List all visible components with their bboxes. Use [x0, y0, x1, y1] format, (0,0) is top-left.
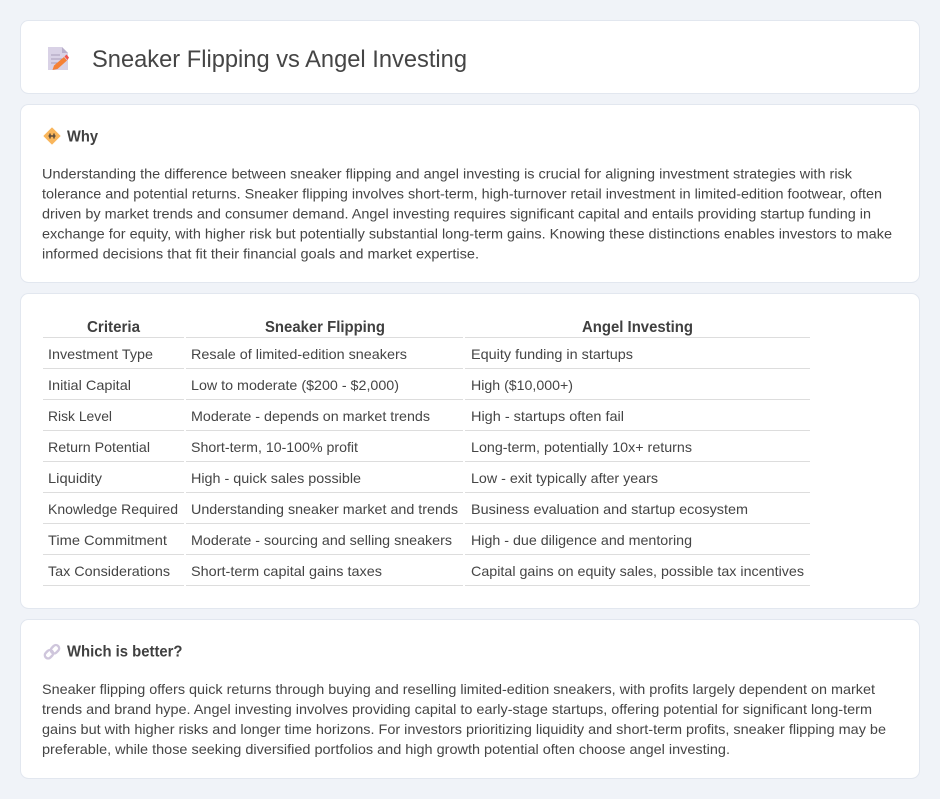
- row: time commitment: [48, 532, 692, 548]
- row: tax considerations: [48, 563, 804, 579]
- row: initial capital: [48, 377, 573, 393]
- row: time commitment: High - due diligence and mentoring: [471, 532, 692, 548]
- icon: warning diamond: [44, 128, 60, 144]
- text block: why: exchange for equity, with higher risk but potentially substantial long-term gains. Knowing these distinctions enables investors to make: [42, 226, 892, 242]
- row: return potential: [48, 439, 692, 455]
- row: risk level: Moderate - depends on market trends: [191, 408, 430, 424]
- text block: why: Understanding the difference between sneaker flipping and angel investing is crucial for aligning investment strategies with risk: [42, 166, 853, 182]
- row: investment type: Equity funding in startups: [471, 346, 633, 362]
- table header row: [87, 319, 693, 336]
- row: tax considerations: Capital gains on equity sales, possible tax incentives: [471, 563, 804, 579]
- row: knowledge required: Business evaluation and startup ecosystem: [471, 501, 748, 517]
- text block: which is better: preferable, while those seeking diversified portfolios and high growth potential often choose angel investing.: [42, 741, 730, 757]
- row: return potential: Long-term, potentially 10x+ returns: [471, 439, 692, 455]
- row: risk level: High - startups often fail: [471, 408, 624, 424]
- panel: which is better: [20, 620, 920, 778]
- row: return potential: Return Potential: [48, 439, 150, 455]
- row: time commitment: Time Commitment: [48, 532, 167, 548]
- text block: which is better: gains but with higher risks and longer time horizons. For investors prioritizing liquidity and short-term profits, sneaker flipping may be: [42, 721, 886, 737]
- table header row: Criteria: [87, 319, 140, 336]
- text block: why: informed decisions that fit their financial goals and market expertise.: [42, 246, 479, 262]
- row: liquidity: Liquidity: [48, 470, 102, 486]
- panel: why: [20, 104, 920, 282]
- title: Sneaker Flipping vs Angel Investing: [92, 46, 467, 73]
- row: initial capital: Initial Capital: [48, 377, 131, 393]
- row: time commitment: Moderate - sourcing and selling sneakers: [191, 532, 452, 548]
- row: liquidity: High - quick sales possible: [191, 470, 361, 486]
- heading: why: Why: [67, 128, 98, 146]
- row: tax considerations: Short-term capital gains taxes: [191, 563, 382, 579]
- text block: why: tolerance and potential returns. Sneaker flipping involves short-term, high-turnover retail investment in limited-edition footwear, often: [42, 186, 882, 202]
- row: tax considerations: Tax Considerations: [48, 563, 170, 579]
- row: investment type: [48, 346, 633, 362]
- table header row: Angel Investing: [582, 319, 693, 336]
- table header row: Sneaker Flipping: [265, 319, 385, 336]
- icon: document with pencil: [48, 47, 69, 70]
- text block: why: driven by market trends and consumer demand. Angel investing requires significant capital and entails providing startup funding in: [42, 206, 871, 222]
- row: risk level: Risk Level: [48, 408, 112, 424]
- row: investment type: Resale of limited-edition sneakers: [191, 346, 407, 362]
- text block: which is better: Sneaker flipping offers quick returns through buying and reselling limited-edition sneakers, with profits largely dependent on market: [42, 681, 875, 697]
- row: risk level: [48, 408, 624, 424]
- row: initial capital: Low to moderate ($200 - $2,000): [191, 377, 399, 393]
- row: initial capital: High ($10,000+): [471, 377, 573, 393]
- row: knowledge required: Understanding sneaker market and trends: [191, 501, 458, 517]
- panel: header: [20, 20, 920, 94]
- text block: which is better: [42, 681, 886, 757]
- icon: chain link: [44, 644, 60, 660]
- row: liquidity: Low - exit typically after years: [471, 470, 658, 486]
- row: knowledge required: [48, 501, 748, 517]
- row: investment type: Investment Type: [48, 346, 153, 362]
- heading: which is better: Which is better?: [67, 644, 182, 660]
- text block: which is better: trends and brand hype. Angel investing involves providing capital to early-stage startups, offering potential for significant long-term: [42, 701, 872, 717]
- panel: comparison table: [20, 294, 920, 608]
- text block: why: [42, 166, 892, 262]
- row: liquidity: [48, 470, 658, 486]
- row: knowledge required: Knowledge Required: [48, 501, 178, 517]
- row: return potential: Short-term, 10-100% profit: [191, 439, 358, 455]
